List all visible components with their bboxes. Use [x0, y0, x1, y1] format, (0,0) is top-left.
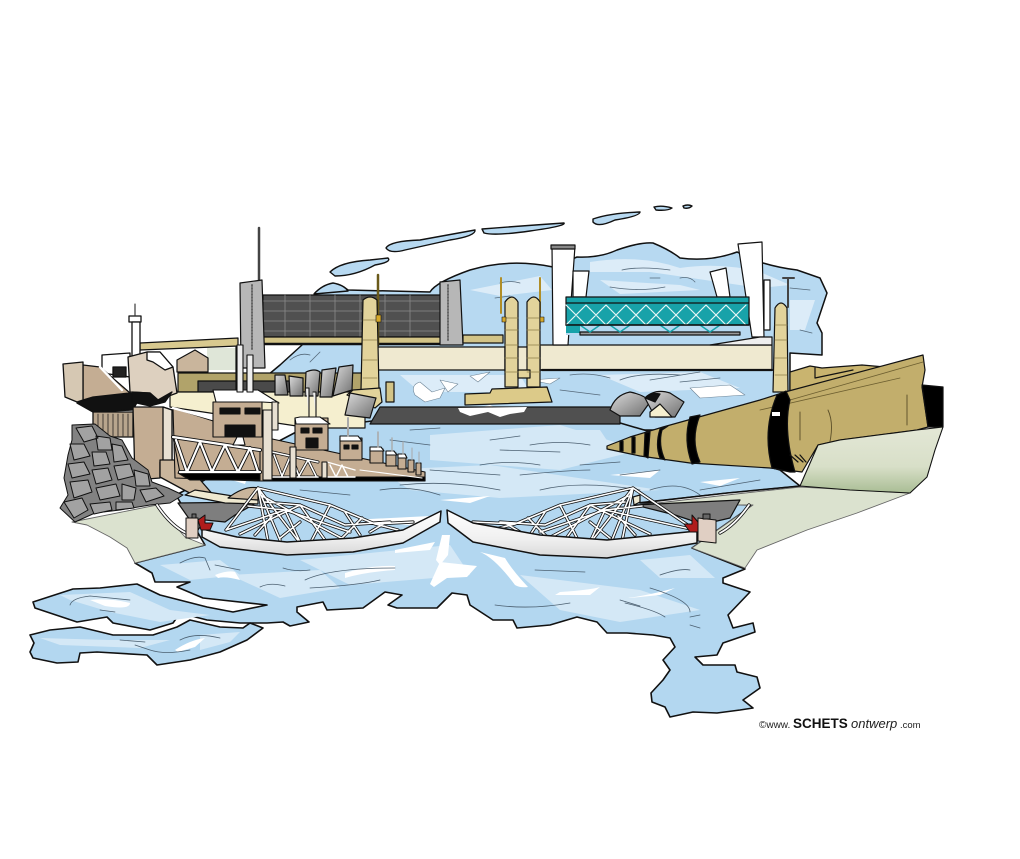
- teal bridge: [566, 297, 749, 335]
- credit text: ©www.: [759, 720, 790, 731]
- right machine block: [684, 514, 716, 543]
- dock right with arm: [633, 495, 749, 533]
- dark lift gate with towers: [240, 228, 503, 368]
- credit text: [759, 716, 921, 731]
- right barrier arc with truss: [447, 488, 697, 558]
- truss 1: [173, 437, 260, 472]
- antenna tower: [134, 304, 136, 315]
- curved arm and dock left: [157, 487, 258, 533]
- pier 4: [370, 449, 383, 463]
- main water: [30, 405, 800, 717]
- big pier: [213, 402, 262, 437]
- yellow columns: [347, 275, 794, 408]
- land right: [636, 486, 910, 568]
- rock pile: [60, 424, 183, 522]
- clouds: [314, 205, 692, 294]
- white towers and teal bridge: [551, 242, 772, 345]
- cream deck: [377, 345, 772, 372]
- credit text: ontwerp: [851, 716, 897, 731]
- left machine block: [186, 514, 213, 538]
- tan tube barrier right: [607, 355, 943, 472]
- truss 2: [272, 452, 318, 477]
- pier 2: [295, 418, 328, 450]
- background buildings left: [140, 338, 365, 428]
- truss 3: [327, 462, 355, 477]
- left barrier arc with truss: [202, 488, 441, 555]
- dark caisson and roller gates: [275, 365, 684, 424]
- back water and sky reflection: [268, 243, 827, 430]
- green land wedge right: [800, 427, 943, 493]
- land left: [72, 505, 205, 563]
- pier 3: [340, 438, 362, 460]
- pier barrier with trusses: [173, 345, 425, 481]
- credit text: SCHETS: [793, 716, 848, 731]
- credit text: .com: [900, 720, 921, 731]
- left building complex: [63, 304, 215, 497]
